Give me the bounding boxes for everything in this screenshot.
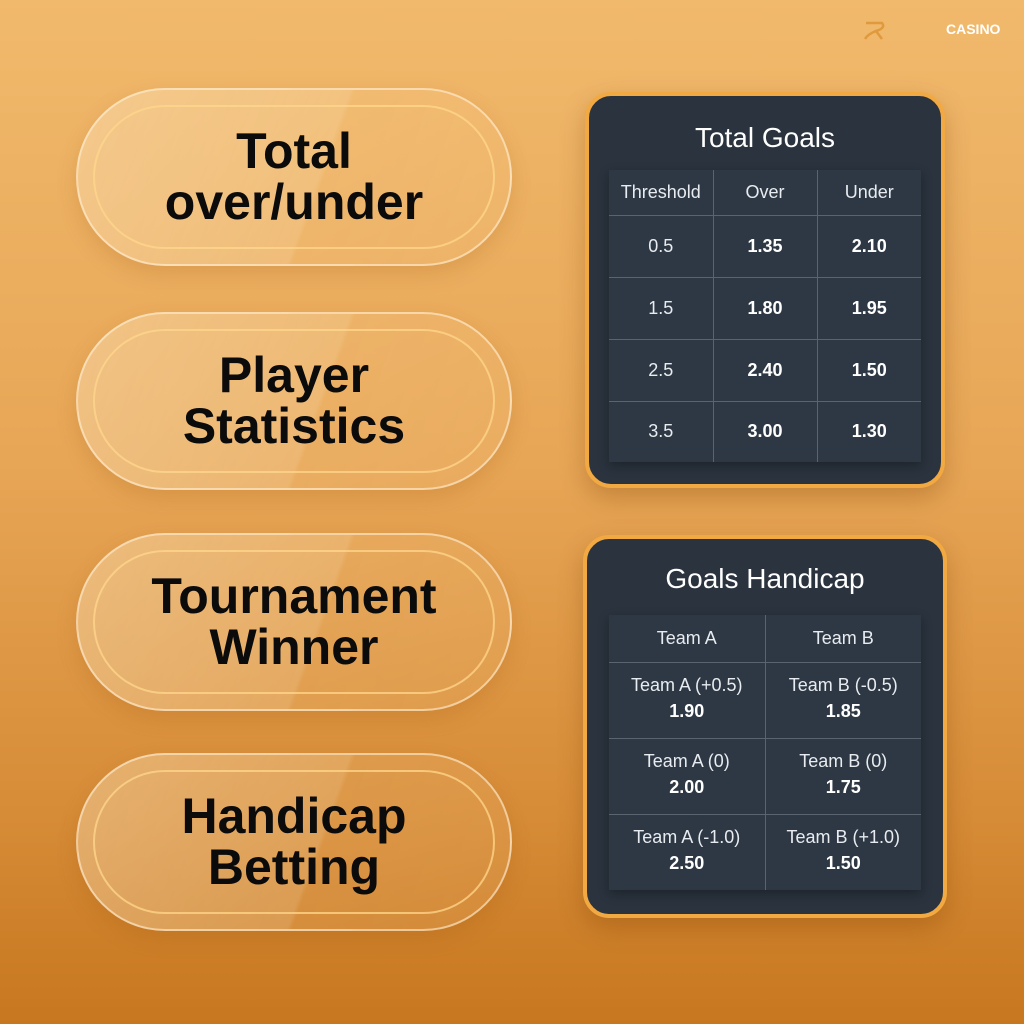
pill: Total over/under: Total: [236, 123, 352, 179]
table: handicap: Team A (+0.5): [631, 674, 743, 694]
table: total goals: [609, 170, 921, 462]
table: total goals: 1.80: [747, 298, 783, 318]
pill: Player Statistics: Statistics: [183, 398, 405, 454]
table: handicap: 2.00: [669, 776, 704, 796]
table: handicap: 1.50: [826, 853, 861, 873]
panel: Total Goals: [585, 92, 945, 488]
table: handicap: Team B: [813, 628, 874, 648]
table: total goals: 2.5: [648, 360, 673, 380]
pill: Total over/under: over/under: [165, 174, 423, 230]
heading: Goals Handicap: [665, 563, 865, 594]
table: handicap: Team A (-1.0): [633, 827, 740, 847]
table: handicap: Team B (+1.0): [786, 827, 900, 847]
table: handicap: 2.50: [669, 853, 704, 873]
pill: Player Statistics: [76, 312, 512, 490]
brand text: CASINO: [946, 21, 1000, 37]
table: handicap: Team B (-0.5): [789, 674, 898, 694]
table: handicap: Team A: [657, 628, 717, 648]
table: handicap: 1.75: [826, 776, 861, 796]
table: total goals: Under: [845, 182, 894, 202]
pill: Tournament Winner: Winner: [210, 619, 378, 675]
table: handicap: Team B (0): [799, 750, 887, 770]
pill: Player Statistics: Player: [219, 347, 369, 403]
table: total goals: 1.5: [648, 298, 673, 318]
table: handicap: 1.90: [669, 700, 704, 720]
table: total goals: 1.35: [747, 236, 783, 256]
icon: logo mark: [864, 22, 884, 40]
pill: Tournament Winner: [76, 533, 512, 711]
panel: Goals Handicap: [583, 535, 947, 918]
pill: Total over/under: [76, 88, 512, 266]
pill: Handicap Betting: [76, 753, 512, 931]
table: total goals: 1.95: [852, 298, 887, 318]
pill: Handicap Betting: Betting: [208, 839, 380, 895]
table: total goals: 1.30: [852, 421, 887, 441]
table: total goals: 2.40: [747, 360, 783, 380]
table: total goals: 0.5: [648, 236, 673, 256]
table: handicap: 1.85: [826, 700, 861, 720]
table: total goals: Threshold: [621, 182, 701, 202]
logo: [864, 21, 1000, 40]
table: total goals: 1.50: [852, 360, 887, 380]
table: total goals: 3.00: [747, 421, 783, 441]
table: total goals: Over: [745, 182, 784, 202]
pill: Handicap Betting: Handicap: [181, 788, 407, 844]
pill: Tournament Winner: Tournament: [151, 568, 437, 624]
table: total goals: 2.10: [852, 236, 887, 256]
heading: Total Goals: [695, 122, 835, 153]
table: total goals: 3.5: [648, 421, 673, 441]
table: handicap: [609, 615, 921, 890]
table: handicap: Team A (0): [644, 750, 730, 770]
